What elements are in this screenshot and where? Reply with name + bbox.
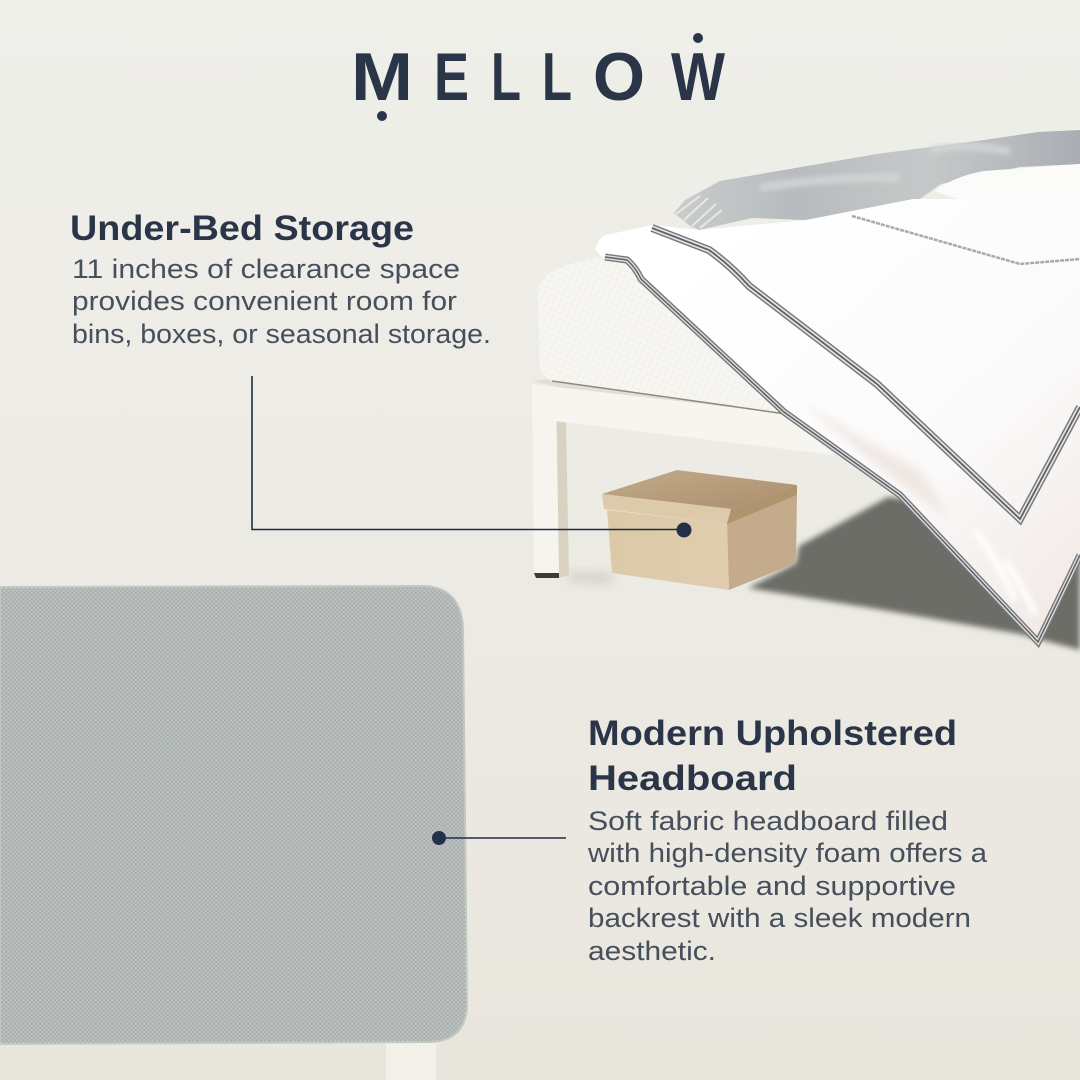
text block: headboard description: backrest with a sleek modern <box>588 903 971 933</box>
callout: leader line to storage box <box>252 376 692 538</box>
white duvet <box>595 199 1080 642</box>
floor shadow <box>568 497 1080 650</box>
callout: leader line to headboard <box>432 831 566 845</box>
logo: W <box>671 39 726 115</box>
headboard panel <box>0 586 467 1044</box>
illustration: upholstered headboard <box>0 586 467 1080</box>
text block: storage description: provides convenient room for <box>72 286 457 316</box>
panel: headboard text <box>587 714 987 966</box>
illustration: bed with storage box <box>532 130 1080 650</box>
grey throw blanket <box>674 130 1080 230</box>
panel: under-bed storage text <box>70 209 491 349</box>
logo: L <box>491 39 521 115</box>
logo <box>351 33 726 121</box>
logo: L <box>542 39 572 115</box>
heading: modern upholstered headboard <box>588 714 957 798</box>
logo: M <box>351 39 413 115</box>
headboard leg <box>386 1040 436 1080</box>
text block: headboard description: with high-density foam offers a <box>587 838 987 868</box>
heading: modern upholstered headboard: Headboard <box>588 759 797 798</box>
mattress <box>538 257 790 416</box>
heading: modern upholstered headboard: Modern Upholstered <box>588 714 957 753</box>
text block: storage description: bins, boxes, or seasonal storage. <box>72 319 491 349</box>
hem stripes <box>605 216 1080 642</box>
bed frame <box>532 379 834 578</box>
pillow <box>934 164 1080 205</box>
text block: headboard description: comfortable and supportive <box>588 871 956 901</box>
logo: E <box>434 39 469 115</box>
text block: headboard description: Soft fabric headboard filled <box>588 806 948 836</box>
text block: storage description: 11 inches of clearance space <box>72 254 460 284</box>
heading: under-bed storage: Under-Bed Storage <box>70 209 414 248</box>
storage box <box>602 470 797 590</box>
text block: headboard description <box>587 806 987 966</box>
text block: storage description <box>72 254 491 349</box>
logo: O <box>593 39 645 115</box>
text block: headboard description: aesthetic. <box>588 936 716 966</box>
